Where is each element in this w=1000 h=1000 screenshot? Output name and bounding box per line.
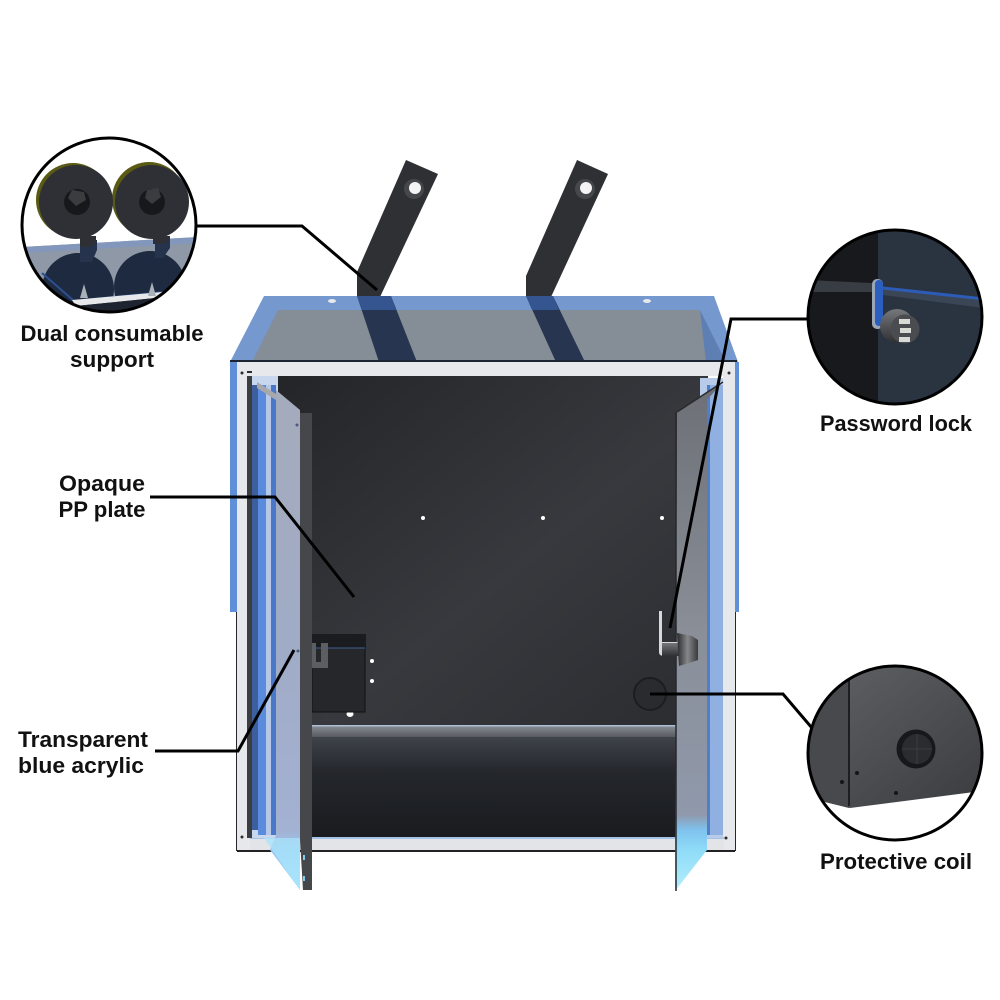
aluminium frame — [237, 362, 735, 851]
inset: protective coil — [806, 664, 984, 842]
label: dual consumable support: Dual consumable — [20, 321, 204, 346]
label: transparent blue acrylic: Transparent — [18, 727, 149, 752]
label: opaque PP plate second line: PP plate — [58, 497, 146, 522]
protective coil grommet — [634, 678, 666, 710]
label: password lock: Password lock — [820, 411, 973, 436]
opaque PP back plate — [278, 376, 708, 726]
acrylic side strips — [230, 362, 739, 851]
inset: password lock — [805, 228, 984, 408]
mounting bracket left — [357, 160, 438, 297]
inset: dual consumable spools — [20, 135, 200, 325]
blue channel inside right — [700, 378, 723, 838]
enclosure product illustration — [230, 160, 739, 891]
callout line: protective coil — [650, 694, 812, 728]
mounting bracket right — [526, 160, 608, 297]
bottom frame rail — [237, 838, 735, 851]
transparent top panel — [230, 296, 738, 362]
blue channel inside left — [247, 376, 278, 838]
right door — [675, 382, 723, 891]
lower shelf — [278, 725, 698, 837]
password lock on door — [659, 611, 698, 666]
label: opaque PP plate: Opaque — [59, 471, 145, 496]
left door — [257, 382, 312, 890]
callout line: password lock — [670, 319, 808, 628]
frame bolts — [240, 371, 730, 840]
callout line: opaque PP plate — [150, 497, 354, 597]
label: transparent blue acrylic second line: blue acrylic — [18, 753, 144, 778]
callout line: transparent blue acrylic — [155, 650, 294, 751]
label: dual consumable support second line: support — [70, 347, 155, 372]
callout line: dual consumable support — [196, 226, 377, 290]
electronics box — [310, 634, 366, 712]
label: protective coil: Protective coil — [820, 849, 972, 874]
mounting holes — [346, 516, 664, 717]
